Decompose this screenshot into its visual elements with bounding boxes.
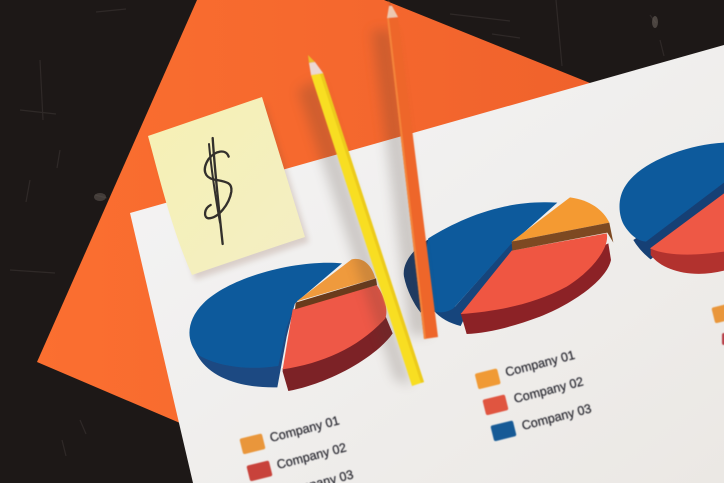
pie 2 brown orange slice side: [512, 223, 613, 251]
swatch: Company 02 red: [246, 460, 273, 481]
hand-drawn dollar sign: [205, 138, 231, 244]
sticky note with dollar sign: [148, 97, 305, 275]
pie 3 dark blue side: [633, 180, 724, 259]
orange pencil lead: [388, 0, 392, 6]
pie 3 red slice side: [651, 230, 724, 274]
pie 1 brown orange slice side: [295, 278, 377, 309]
pencil shadows: [298, 30, 430, 385]
pie chart 1: [189, 259, 393, 391]
pie 2 blue slice top: [420, 202, 557, 312]
yellow pencil body: [311, 73, 424, 386]
yellow pencil wood tip: [309, 62, 323, 75]
swatch: orange: [711, 302, 724, 323]
pie 2 red slice top: [461, 233, 607, 314]
pie 2 red slice side: [461, 243, 611, 334]
sticky note shadow: [152, 103, 309, 280]
label: Company 02: Company 02: [275, 440, 348, 472]
pie 2 dark blue rim left of pencil: [404, 238, 440, 313]
pie 1 blue slice side: [193, 303, 295, 387]
orange pencil light stripe: [387, 18, 426, 339]
legend for pie 3 (cropped): [711, 302, 724, 345]
legend for pie 1: [239, 413, 355, 483]
pie chart 3 (cropped at right edge): [619, 143, 724, 274]
pie 2 orange slice top: [512, 197, 609, 242]
yellow pencil lead: [308, 55, 315, 63]
label: Company 03: Company 03: [520, 401, 593, 433]
pie 1 orange slice top: [297, 259, 375, 301]
orange pencil body: [387, 17, 438, 339]
swatch: Company 01 orange: [239, 433, 266, 454]
swatch: Company 03 blue: [490, 420, 517, 441]
swatch: Company 01 orange: [475, 368, 501, 389]
legend for pie 2: [475, 348, 593, 441]
orange pencil wood tip: [387, 6, 398, 18]
pie 3 blue slice top: [619, 143, 724, 242]
pie 1 blue slice top: [189, 263, 342, 368]
note paper: [148, 97, 305, 275]
yellow pencil: [308, 55, 424, 386]
label: Company 01: Company 01: [504, 348, 576, 379]
label: Company 02: Company 02: [512, 374, 585, 406]
pie 2 blue slice side: [433, 243, 513, 326]
pie 1 red slice side: [283, 307, 393, 391]
white printed sheet: [130, 45, 724, 483]
pie chart 2: [404, 197, 613, 334]
pie 1 red slice top: [283, 285, 386, 369]
pie 3 red slice top: [650, 193, 724, 255]
label: Company 01: Company 01: [268, 413, 341, 445]
swatch: red: [722, 333, 724, 345]
orange pencil: [387, 0, 438, 339]
orange paper sheet: [37, 0, 590, 423]
swatch: Company 02 red: [482, 394, 509, 415]
yellow pencil shaded edge: [320, 73, 424, 383]
